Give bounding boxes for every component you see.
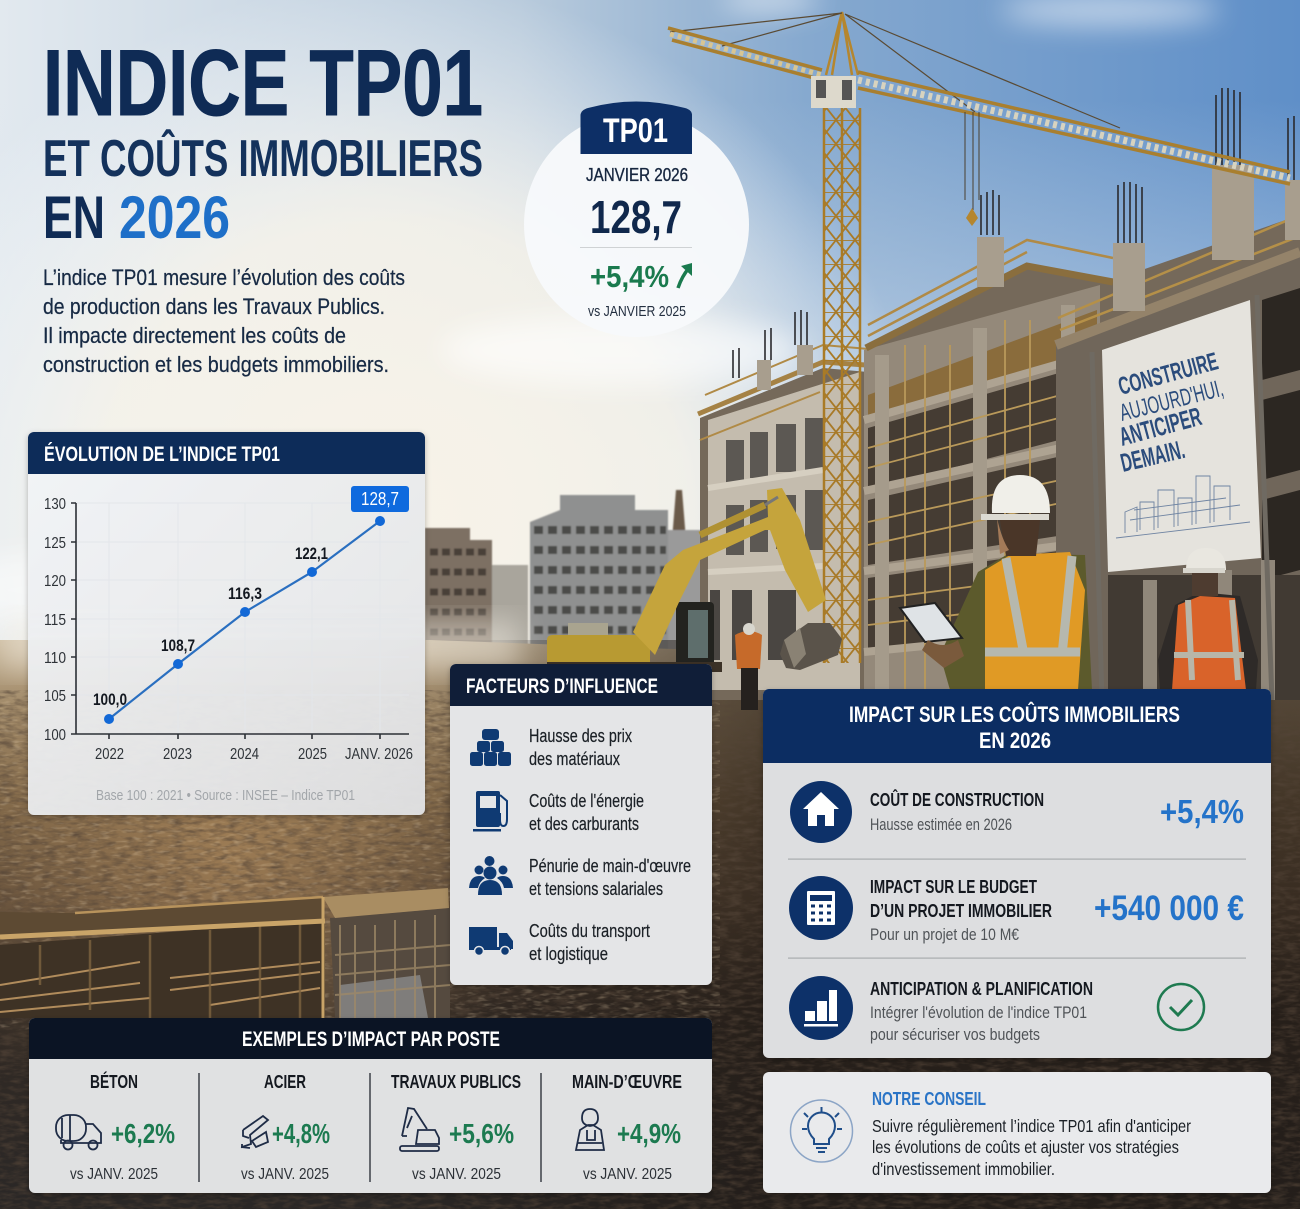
line chart: 100 [44, 727, 66, 744]
line chart: 105 [44, 688, 66, 705]
impact header [763, 689, 1271, 763]
chart header: ÉVOLUTION DE L’INDICE TP01 [44, 443, 280, 466]
row: construction cost: +5,4% [1160, 793, 1244, 830]
row: planning: pour sécuriser vos budgets [870, 1026, 1040, 1044]
middle section [864, 285, 1100, 690]
comparison notes: vs JANV. 2025 [241, 1166, 329, 1183]
impact header: EN 2026 [979, 728, 1051, 753]
factor labels: Coûts du transport [529, 921, 650, 941]
title: ET COÛTS IMMOBILIERS [43, 129, 483, 188]
billboard: ANTICIPER [1116, 401, 1205, 452]
comparison notes: vs JANV. 2025 [583, 1166, 672, 1183]
billboard: DEMAIN. [1118, 434, 1188, 478]
KPI badge: TP01 [603, 112, 668, 150]
percentages: +4,9% [617, 1118, 681, 1149]
line chart: 125 [44, 535, 66, 552]
main building [698, 88, 1300, 700]
examples header [29, 1018, 712, 1059]
line chart: 120 [44, 573, 66, 590]
intro paragraph: construction et les budgets immobiliers. [43, 352, 389, 377]
excavator [547, 488, 842, 672]
row: project budget: +540 000 € [1094, 889, 1244, 928]
factor labels: des matériaux [529, 749, 620, 769]
impact header: IMPACT SUR LES COÛTS IMMOBILIERS [849, 702, 1180, 727]
KPI badge: 128,7 [590, 191, 682, 243]
row: planning [789, 976, 1204, 1044]
title [43, 30, 483, 251]
row: project budget: IMPACT SUR LE BUDGET [870, 876, 1038, 897]
factors header: FACTEURS D’INFLUENCE [466, 675, 658, 698]
title: 2026 [119, 184, 230, 251]
column labels: MAIN-D’ŒUVRE [572, 1071, 682, 1092]
comparison notes: vs JANV. 2025 [412, 1166, 501, 1183]
icon: light bulb [790, 1100, 852, 1162]
worker far [735, 623, 762, 710]
line chart: JANV. 2026 [345, 746, 413, 763]
panel: examples by cost item [29, 1018, 712, 1193]
factor labels: Hausse des prix [529, 726, 632, 746]
icon: materials [470, 729, 511, 766]
percentages: +4,8% [272, 1118, 330, 1149]
chart header [28, 432, 425, 474]
row: construction cost: COÛT DE CONSTRUCTION [870, 789, 1044, 810]
line chart: 2025 [298, 746, 327, 763]
engineer with tablet [900, 475, 1092, 690]
row: planning: ANTICIPATION & PLANIFICATION [870, 978, 1093, 999]
panel: evolution chart [28, 432, 425, 815]
icon: truck [469, 927, 513, 956]
factor labels: Coûts de l'énergie [529, 791, 644, 811]
percentages: +5,6% [449, 1118, 514, 1149]
intro paragraph [43, 265, 405, 377]
line chart: 100,0 [93, 690, 127, 709]
left wing [708, 372, 860, 690]
ground [0, 620, 1300, 1209]
billboard: CONSTRUIRE [1115, 347, 1221, 401]
panel: advice: NOTRE CONSEIL [872, 1088, 986, 1109]
examples header: EXEMPLES D’IMPACT PAR POSTE [242, 1028, 500, 1051]
icon: fuel pump [473, 791, 507, 832]
KPI badge: +5,4% [590, 259, 669, 294]
percentages: +6,2% [111, 1118, 175, 1149]
callout: latest value [351, 486, 409, 512]
row: construction cost [790, 781, 1244, 843]
panel: real-estate cost impact [763, 689, 1271, 1058]
second worker [1158, 548, 1258, 690]
factor labels: et tensions salariales [529, 879, 663, 899]
rebar formwork [0, 888, 450, 1018]
line chart [44, 486, 413, 804]
columns [757, 165, 1300, 390]
line chart: 115 [44, 612, 66, 629]
panel: advice: d'investissement immobilier. [872, 1159, 1055, 1179]
row: project budget: Pour un projet de 10 M€ [870, 926, 1019, 944]
far buildings [425, 490, 708, 650]
row: planning: Intégrer l'évolution de l'indice TP01 [870, 1004, 1087, 1022]
KPI badge [524, 102, 749, 337]
icon: up arrow [678, 263, 692, 288]
icon: worker [576, 1109, 604, 1150]
panel: advice: les évolutions de coûts et ajuster vos stratégies [872, 1137, 1179, 1157]
KPI badge: vs JANVIER 2025 [588, 303, 686, 320]
line chart: 130 [44, 496, 66, 513]
comparison notes: vs JANV. 2025 [70, 1166, 158, 1183]
line chart: 116,3 [228, 584, 262, 603]
column labels: BÉTON [90, 1071, 138, 1092]
panel: influence factors [450, 664, 712, 985]
icon: excavator line [400, 1108, 439, 1151]
factor labels: et logistique [529, 944, 608, 964]
icon: steel beam [241, 1116, 268, 1148]
factors header [450, 664, 712, 706]
line chart: 110 [44, 650, 66, 667]
callout: latest value: 128,7 [361, 489, 399, 509]
intro paragraph: Il impacte directement les coûts de [43, 323, 346, 348]
percentages [111, 1118, 681, 1149]
comparison notes [70, 1166, 672, 1183]
icon: concrete mixer [56, 1115, 101, 1150]
row: project budget: D’UN PROJET IMMOBILIER [870, 900, 1052, 921]
icon: workforce [469, 856, 513, 895]
factor labels: Pénurie de main-d'œuvre [529, 856, 691, 876]
column labels [90, 1071, 682, 1092]
column labels: TRAVAUX PUBLICS [391, 1071, 521, 1092]
factor labels [529, 726, 691, 964]
tower crane [668, 12, 1290, 663]
billboard [1092, 295, 1272, 700]
panel: advice: Suivre régulièrement l’indice TP01 afin d'anticiper [872, 1116, 1191, 1136]
KPI badge: JANVIER 2026 [586, 165, 688, 185]
line chart: 2023 [163, 746, 192, 763]
icon: check [1158, 984, 1204, 1030]
title: EN [43, 184, 105, 251]
line chart: 108,7 [161, 636, 195, 655]
line chart: Base 100 : 2021 • Source : INSEE – Indice TP01 [96, 788, 355, 804]
row: project budget [789, 876, 1244, 944]
intro paragraph: de production dans les Travaux Publics. [43, 294, 385, 319]
line chart: 122,1 [295, 544, 328, 563]
factor labels: et des carburants [529, 814, 639, 834]
line chart: 2022 [95, 746, 124, 763]
right section [1056, 255, 1300, 700]
line chart: 2024 [230, 746, 259, 763]
panel: advice [763, 1072, 1271, 1193]
row: construction cost: Hausse estimée en 2026 [870, 816, 1012, 834]
title: INDICE TP01 [43, 30, 483, 135]
column labels: ACIER [264, 1071, 306, 1092]
intro paragraph: L’indice TP01 mesure l’évolution des coûts [43, 265, 405, 290]
billboard: AUJOURD'HUI, [1117, 375, 1226, 427]
